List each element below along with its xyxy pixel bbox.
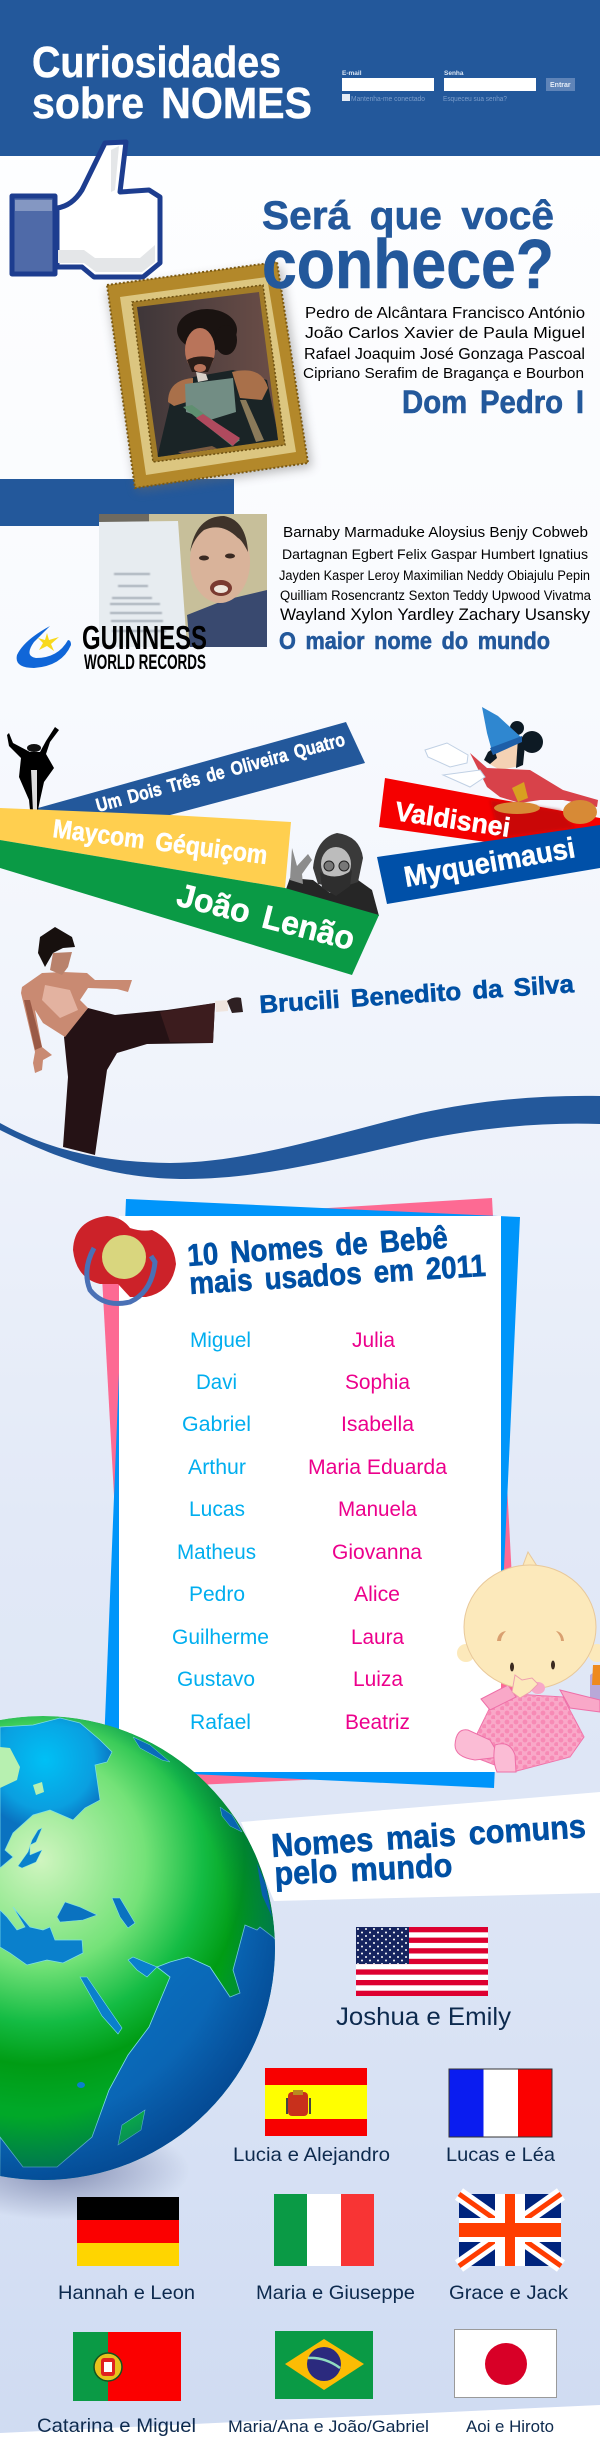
banner: Um Dois Três de Oliveira Quatro: Um Dois Três de Oliveira Quatro	[94, 730, 347, 817]
text: full name of Dom Pedro I: Cipriano Serafim de Bragança e Bourbon	[303, 365, 584, 382]
list: boy names: Guilherme	[172, 1626, 269, 1649]
paper: blue sheet	[103, 1199, 520, 1788]
login form: E-mail	[342, 70, 362, 77]
text: longest name	[279, 524, 591, 624]
logo: Guinness World Records	[17, 619, 207, 674]
text: longest name: Dartagnan Egbert Felix Gaspar Humbert Ignatius	[282, 546, 588, 562]
label: Portugal names: Catarina e Miguel	[37, 2415, 196, 2437]
flag: Italy	[274, 2194, 374, 2266]
login form	[342, 70, 575, 103]
header band	[0, 0, 600, 156]
list: boy names: Matheus	[177, 1541, 256, 1564]
label: Japan names: Aoi e Hiroto	[466, 2418, 554, 2436]
title: sobre NOMES	[32, 79, 312, 128]
icon: baby	[455, 1552, 600, 1772]
list: girl names: Sophia	[345, 1371, 410, 1394]
text: longest name: Quilliam Rosencrantz Sexton Teddy Upwood Vivatma	[280, 588, 591, 603]
heading: Será que você conhece?: Será que você	[262, 194, 554, 238]
photo: man holding certificate	[99, 514, 267, 647]
icon: Michael Jackson silhouette	[7, 727, 59, 826]
list: girl names: Laura	[351, 1626, 404, 1649]
flag: Portugal	[73, 2332, 181, 2401]
banner: Myqueimausi: Myqueimausi	[402, 832, 578, 894]
title: Curiosidades	[32, 38, 281, 87]
list: boy names: Davi	[196, 1371, 237, 1394]
list: boy names: Gustavo	[177, 1668, 255, 1691]
login form: Senha	[444, 70, 464, 77]
flag: France	[449, 2069, 552, 2137]
list: boy names: Arthur	[188, 1456, 246, 1479]
panel: baby names	[73, 1198, 522, 1788]
label: UK names: Grace e Jack	[449, 2282, 568, 2304]
paper: white card	[119, 1216, 501, 1772]
list: girl names: Julia	[352, 1329, 395, 1352]
list: girl names: Isabella	[341, 1413, 414, 1436]
icon: Mickey sorcerer	[425, 707, 598, 824]
heading: top 10 baby names	[186, 1220, 487, 1301]
label: Germany names: Hannah e Leon	[58, 2282, 195, 2304]
heading: top 10 baby names: mais usados em 2011	[188, 1248, 487, 1301]
list: girl names: Beatriz	[345, 1711, 410, 1734]
heading: Será que você conhece?: conhece?	[262, 225, 554, 303]
text: longest name: Jayden Kasper Leroy Maximilian Neddy Obiajulu Pepin	[279, 568, 590, 583]
list: boy names: Gabriel	[182, 1413, 251, 1436]
text: full name of Dom Pedro I: Rafael Joaquim José Gonzaga Pascoal	[304, 346, 585, 363]
flag: Spain	[265, 2068, 367, 2136]
flag: USA	[356, 1927, 488, 1996]
banner: Valdisnei	[379, 778, 600, 843]
banner: João Lenão	[0, 840, 379, 975]
heading: Será que você conhece?	[262, 194, 554, 303]
list: boy names: Lucas	[189, 1498, 245, 1521]
banner: Valdisnei: Valdisnei	[393, 796, 512, 843]
globe shadow	[0, 2120, 190, 2220]
heading: O maior nome do mundo: O maior nome do mundo	[279, 628, 550, 655]
text: longest name: Barnaby Marmaduke Aloysius Benjy Cobweb	[283, 524, 588, 541]
list: girl names: Manuela	[338, 1498, 417, 1521]
list: boy names	[172, 1329, 269, 1734]
banner: Maycom Géquiçom	[0, 808, 291, 888]
icon: pacifier	[73, 1216, 176, 1304]
label: Italy names: Maria e Giuseppe	[256, 2282, 415, 2304]
banner: Myqueimausi	[377, 825, 600, 904]
flag: Japan	[454, 2330, 556, 2398]
text: full name of Dom Pedro I: Pedro de Alcântara Francisco António	[305, 305, 585, 322]
label: USA names: Joshua e Emily	[336, 2003, 512, 2031]
heading: Nomes mais comuns pelo mundo	[270, 1807, 587, 1892]
banner: Maycom Géquiçom: Maycom Géquiçom	[51, 813, 269, 870]
list: girl names: Giovanna	[332, 1541, 422, 1564]
list: boy names: Pedro	[189, 1583, 245, 1606]
photo: John Lennon	[285, 833, 379, 916]
flag: Brazil	[275, 2331, 373, 2399]
text: full name of Dom Pedro I: João Carlos Xavier de Paula Miguel	[305, 325, 585, 342]
login form: Mantenha-me conectado	[351, 96, 425, 103]
label: Brazil names: Maria/Ana e João/Gabriel	[228, 2418, 429, 2436]
heading: Nomes mais comuns pelo mundo: pelo mundo	[274, 1846, 453, 1892]
icon: globe	[0, 1716, 285, 2200]
login form: Entrar	[550, 82, 571, 89]
list: girl names: Alice	[354, 1583, 400, 1606]
framed portrait of Dom Pedro I	[107, 262, 312, 492]
flag: UK	[459, 2194, 561, 2266]
list: girl names: Maria Eduarda	[308, 1456, 447, 1479]
text: longest name: Wayland Xylon Yardley Zachary Usansky	[280, 605, 590, 624]
list: girl names: Luiza	[353, 1668, 403, 1691]
title	[32, 38, 312, 128]
list: boy names: Rafael	[190, 1711, 251, 1734]
list: girl names	[308, 1329, 447, 1734]
wave divider	[0, 1096, 600, 1179]
banner: João Lenão: João Lenão	[173, 876, 359, 957]
logo: Guinness World Records: WORLD RECORDS	[84, 651, 206, 674]
heading: Brucili Benedito da Silva: Brucili Benedito da Silva	[259, 970, 576, 1019]
paper: pink sheet	[99, 1198, 522, 1788]
text: full name of Dom Pedro I	[303, 305, 585, 382]
icon: Bruce Lee kicking	[21, 927, 243, 1155]
flag: Germany	[77, 2197, 179, 2266]
heading: top 10 baby names: 10 Nomes de Bebê	[186, 1220, 449, 1273]
label: France names: Lucas e Léa	[446, 2144, 555, 2166]
heading: Dom Pedro I: Dom Pedro I	[402, 384, 584, 420]
blue band behind guinness photo	[0, 479, 234, 526]
logo: Guinness World Records: GUINNESS	[82, 619, 207, 656]
icon: thumbs up	[12, 142, 160, 277]
login form: Esqueceu sua senha?	[443, 96, 507, 103]
list: boy names: Miguel	[190, 1329, 251, 1352]
label: Spain names: Lucia e Alejandro	[233, 2144, 390, 2166]
banner: white strip for world names	[241, 1792, 600, 1901]
white bottom wedge	[0, 2405, 600, 2457]
